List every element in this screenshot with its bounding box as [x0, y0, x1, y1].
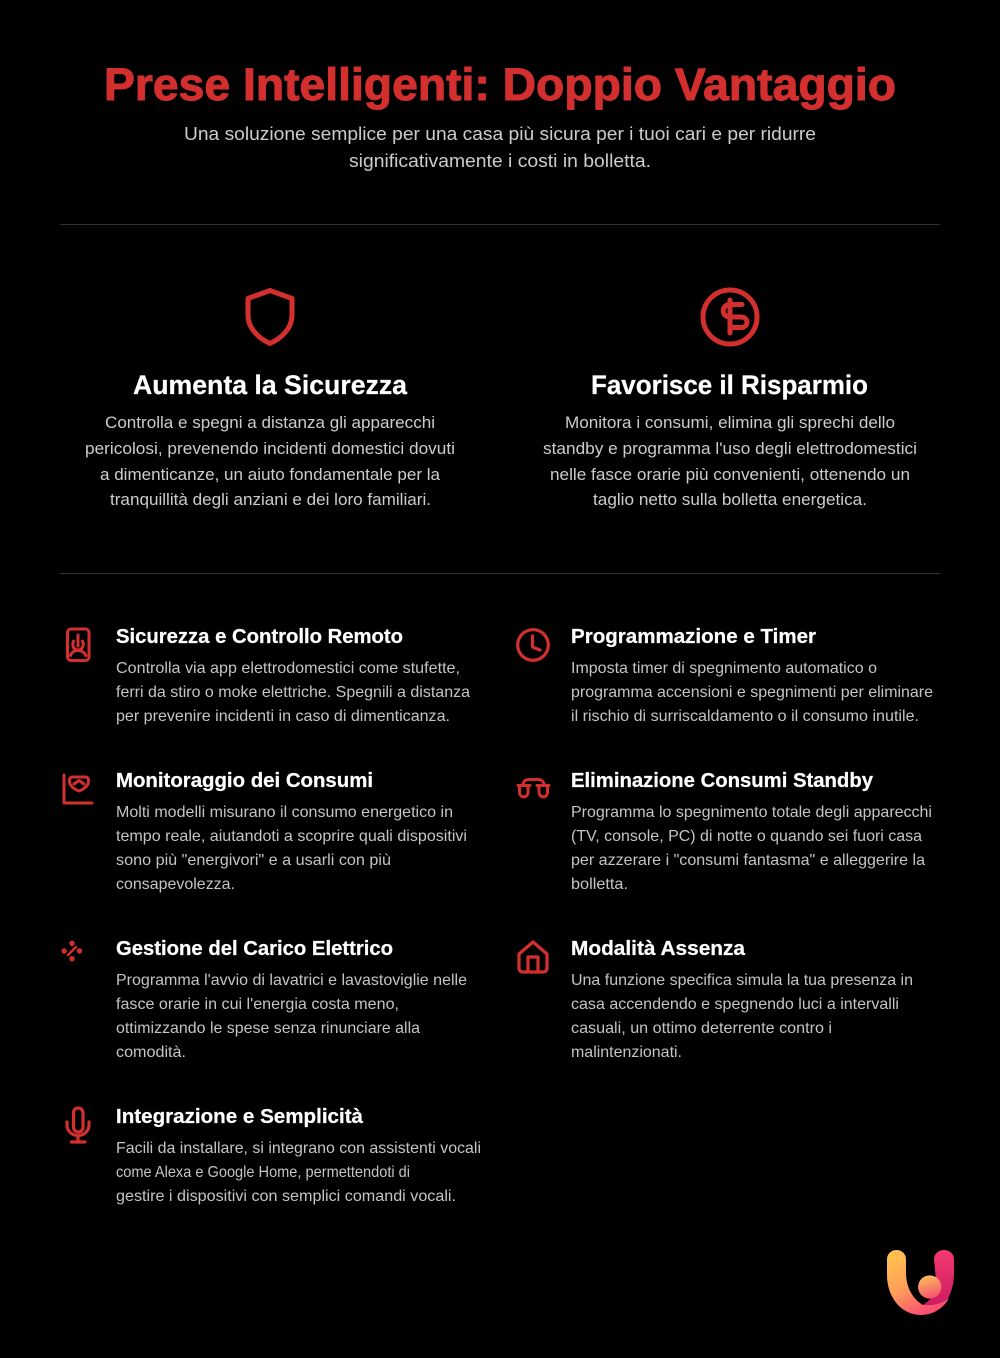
- description: ferri da stiro o moke elettriche. Spegnili a distanza: [116, 684, 470, 701]
- description: bolletta.: [571, 876, 628, 893]
- text: sicurezza: pericolosi, prevenendo incidenti domestici dovuti: [85, 439, 455, 458]
- description: consapevolezza.: [116, 876, 235, 893]
- icon: plugs: [518, 780, 549, 797]
- heading: Modalità Assenza: [571, 937, 746, 960]
- description: come Alexa e Google Home, permettendoti di: [116, 1164, 410, 1181]
- description: [571, 804, 932, 893]
- description: gestire i dispositivi con semplici comandi vocali.: [116, 1188, 456, 1205]
- heading: Gestione del Carico Elettrico: [116, 937, 393, 960]
- description: [116, 1140, 481, 1205]
- heading: Eliminazione Consumi Standby: [571, 769, 874, 792]
- item: monitoraggio dei consumi: [64, 769, 467, 893]
- text: risparmio: Monitora i consumi, elimina gli sprechi dello: [565, 413, 895, 432]
- text: sicurezza: a dimenticanze, un aiuto fondamentale per la: [100, 465, 441, 484]
- text: risparmio: standby e programma l'uso degli elettrodomestici: [543, 439, 917, 458]
- subtitle: significativamente i costi in bolletta.: [349, 150, 651, 171]
- description: comodità.: [116, 1044, 186, 1061]
- description: Una funzione specifica simula la tua presenza in: [571, 972, 913, 989]
- description: Programma lo spegnimento totale degli apparecchi: [571, 804, 932, 821]
- item: sicurezza e controllo remoto: [68, 625, 470, 725]
- description: Facili da installare, si integrano con assistenti vocali: [116, 1140, 481, 1157]
- text: sicurezza: tranquillità degli anziani e dei loro familiari.: [110, 490, 431, 509]
- heading: sicurezza: Aumenta la Sicurezza: [133, 370, 407, 400]
- description: Programma l'avvio di lavatrici e lavastoviglie nelle: [116, 972, 467, 989]
- description: [116, 972, 467, 1061]
- text: sicurezza: Controlla e spegni a distanza gli apparecchi: [105, 413, 435, 432]
- icon: clock: [518, 630, 548, 660]
- item: eliminazione consumi standby: [518, 769, 932, 893]
- text: risparmio: taglio netto sulla bolletta energetica.: [593, 490, 867, 509]
- description: [571, 660, 933, 725]
- title: Prese Intelligenti: Doppio Vantaggio: [104, 59, 896, 110]
- description: [116, 804, 467, 893]
- icon: coin: [703, 290, 757, 344]
- icon: microphone: [67, 1108, 89, 1142]
- description: per azzerare i "consumi fantasma" e alleggerire la: [571, 852, 925, 869]
- item: programmazione e timer: [518, 625, 933, 725]
- description: sono più "energivori" e a usarli con più: [116, 852, 391, 869]
- heading: risparmio: Favorisce il Risparmio: [591, 370, 868, 400]
- description: il rischio di surriscaldamento o il consumo inutile.: [571, 708, 919, 725]
- heading: Sicurezza e Controllo Remoto: [116, 625, 403, 648]
- description: malintenzionati.: [571, 1044, 682, 1061]
- description: casa accendendo e spegnendo luci a intervalli: [571, 996, 899, 1013]
- panel: sicurezza: [85, 290, 455, 509]
- item: modalità assenza: [519, 937, 913, 1061]
- text: sicurezza: [85, 413, 455, 509]
- description: (TV, console, PC) di notte o quando sei fuori casa: [571, 828, 922, 845]
- heading: Programmazione e Timer: [571, 625, 816, 648]
- text: risparmio: nelle fasce orarie più convenienti, ottenendo un: [550, 465, 910, 484]
- heading: Integrazione e Semplicità: [116, 1105, 364, 1128]
- description: tempo reale, aiutandoti a scoprire quali dispositivi: [116, 828, 467, 845]
- description: casuali, un ottimo deterrente contro i: [571, 1020, 832, 1037]
- description: ottimizzando le spese senza rinunciare alla: [116, 1020, 420, 1037]
- icon: load nodes: [63, 942, 81, 960]
- text: risparmio: [543, 413, 917, 509]
- icon: remote power: [68, 629, 89, 660]
- description: Imposta timer di spegnimento automatico o: [571, 660, 877, 677]
- icon: chart: [64, 775, 92, 803]
- panel: risparmio: [543, 290, 917, 509]
- heading: Monitoraggio dei Consumi: [116, 769, 373, 792]
- description: programma accensioni e spegnimenti per eliminare: [571, 684, 933, 701]
- description: Controlla via app elettrodomestici come stufette,: [116, 660, 460, 677]
- icon: house: [519, 942, 547, 972]
- subtitle: Una soluzione semplice per una casa più sicura per i tuoi cari e per ridurre: [184, 123, 816, 144]
- subtitle: [184, 123, 816, 171]
- description: fasce orarie in cui l'energia costa meno,: [116, 996, 399, 1013]
- description: Molti modelli misurano il consumo energetico in: [116, 804, 453, 821]
- logo: [887, 1250, 954, 1315]
- description: [571, 972, 913, 1061]
- description: [116, 660, 470, 725]
- description: per prevenire incidenti in caso di dimenticanza.: [116, 708, 450, 725]
- item: gestione del carico elettrico: [63, 937, 467, 1061]
- icon: shield: [248, 290, 292, 344]
- item: integrazione e semplicità: [67, 1105, 481, 1205]
